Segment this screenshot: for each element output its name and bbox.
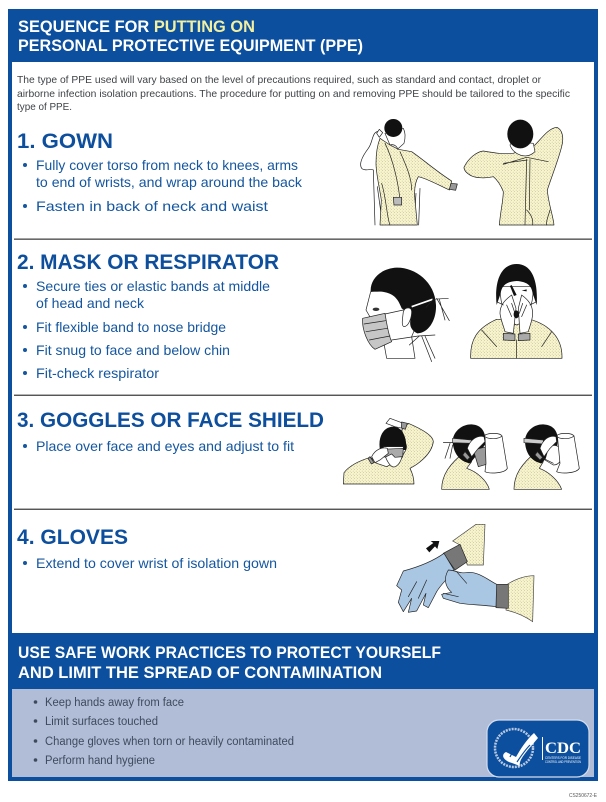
- safe practices list: Keep hands away from face: [45, 697, 184, 709]
- section 2: mask or respirator: [17, 250, 562, 381]
- CDC logo: [487, 720, 589, 777]
- safe practices list: Limit surfaces touched: [45, 716, 158, 728]
- section 3: goggles or face shield: [17, 408, 579, 489]
- divider: [14, 238, 592, 240]
- intro text: The type of PPE used will vary based on the level of precautions required, such as standard and contact, droplet or: [17, 74, 541, 86]
- gown bullets: [23, 157, 303, 214]
- section 1: gown: [17, 119, 563, 225]
- divider: [14, 395, 592, 396]
- heading: goggles: 3. GOGGLES OR FACE SHIELD: [17, 408, 324, 432]
- safe practices heading: USE SAFE WORK PRACTICES TO PROTECT YOURSELF: [18, 643, 441, 662]
- safe practices panel: [12, 689, 594, 777]
- heading: mask: 2. MASK OR RESPIRATOR: [17, 250, 279, 274]
- illustration: tying gown at back: [464, 120, 563, 225]
- title: SEQUENCE FOR PUTTING ON: [18, 17, 255, 36]
- illustration: fitting nose band: [471, 264, 562, 358]
- heading: gown: 1. GOWN: [17, 129, 113, 153]
- CDC wordmark: CDC: [545, 740, 581, 757]
- mask bullets: Fit snug to face and below chin: [36, 342, 230, 358]
- illustration: tying mask: [363, 268, 449, 362]
- illustration: gloves over cuffs: [397, 524, 534, 622]
- safe practices list: Perform hand hygiene: [45, 755, 155, 767]
- CDC wordmark: CENTERS FOR DISEASE: [545, 756, 582, 760]
- illustration: putting on goggles: [343, 418, 433, 484]
- icon: HHS seal: [495, 729, 538, 767]
- footer code: CS250672-E: [569, 793, 597, 799]
- mask bullets: Secure ties or elastic bands at middle: [36, 278, 270, 294]
- safe practices heading: [18, 643, 441, 682]
- mask bullets: [23, 278, 270, 381]
- mask bullets: Fit flexible band to nose bridge: [36, 319, 226, 335]
- icon: arrow: [426, 541, 439, 552]
- header band: [8, 9, 598, 62]
- gown bullets: to end of wrists, and wrap around the back: [36, 174, 303, 190]
- mask bullets: of head and neck: [36, 295, 145, 311]
- safe practices list: Change gloves when torn or heavily contaminated: [45, 736, 294, 748]
- gown bullets: Fully cover torso from neck to knees, arms: [36, 157, 298, 173]
- gloves bullet: Extend to cover wrist of isolation gown: [36, 555, 277, 571]
- safe practices band: [8, 633, 598, 689]
- safe practices heading: AND LIMIT THE SPREAD OF CONTAMINATION: [18, 663, 382, 682]
- heading: gloves: 4. GLOVES: [17, 525, 128, 549]
- illustration: face shield over mask: [442, 424, 507, 489]
- safe practices list: [34, 697, 294, 767]
- goggles bullet: Place over face and eyes and adjust to fit: [36, 438, 294, 454]
- illustration: face shield over respirator: [514, 424, 579, 489]
- intro text: [17, 74, 570, 113]
- mask bullets: Fit-check respirator: [36, 365, 159, 381]
- intro text: airborne infection isolation precautions. The procedure for putting on and removing PPE should be tailored to the specific: [17, 88, 570, 100]
- title: PERSONAL PROTECTIVE EQUIPMENT (PPE): [18, 36, 363, 55]
- CDC wordmark: [542, 737, 582, 764]
- divider: [14, 509, 592, 510]
- section 4: gloves: [17, 524, 534, 622]
- intro text: type of PPE.: [17, 101, 72, 113]
- illustration: putting on gown: [361, 119, 457, 225]
- gown bullets: Fasten in back of neck and waist: [36, 198, 268, 214]
- title: [18, 17, 363, 55]
- CDC wordmark: CONTROL AND PREVENTION: [545, 760, 581, 764]
